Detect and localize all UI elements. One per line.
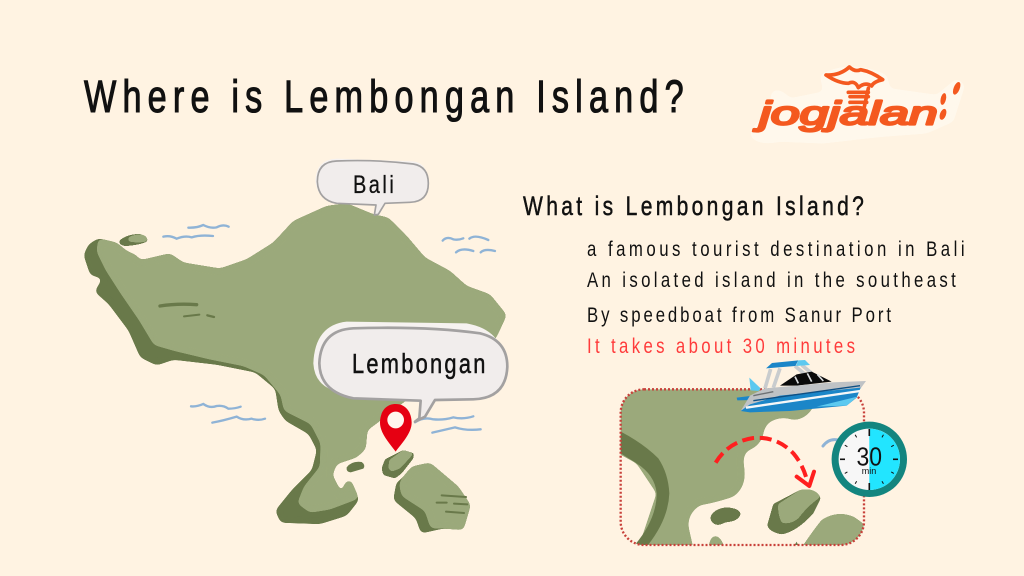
inset land and islands [620, 389, 864, 545]
logo halo [750, 67, 965, 143]
logo wordmark: jogjalan [753, 95, 938, 132]
logo: jogjalan [750, 67, 965, 143]
small island northwest [119, 234, 148, 246]
Bali speech bubble [315, 159, 428, 215]
text block: facts: By speedboat from Sanur Port [587, 304, 892, 328]
Bali island shadow [84, 203, 507, 524]
icon: red location pin [380, 404, 412, 452]
stopwatch number: 30 [856, 442, 882, 472]
Nusa Penida island [393, 463, 471, 533]
map: Bali and Lembongan [84, 159, 507, 533]
terrain marks [160, 304, 214, 317]
inset dotted frame [621, 389, 864, 545]
Bali island land [97, 203, 507, 513]
logo umbrella [826, 67, 883, 108]
Lembongan island [382, 450, 414, 478]
water waves [163, 225, 495, 433]
dashed red route arrow [716, 438, 814, 486]
Lembongan speech bubble [313, 322, 507, 422]
Nusa Ceningan islet [347, 462, 364, 472]
bubble label: Bali: Bali [353, 171, 394, 199]
stopwatch face [839, 429, 900, 490]
Nusa Penida terrain marks [437, 495, 467, 513]
logo exclamation marks [938, 81, 962, 121]
stopwatch unit: min [862, 466, 876, 476]
stopwatch ring [832, 422, 907, 497]
icon: stopwatch 30 min [823, 422, 907, 497]
wave behind stopwatch [823, 440, 838, 446]
text block: facts: a famous tourist destination in Bali [587, 238, 965, 262]
title: Where is Lembongan Island? [84, 73, 684, 122]
text block: facts: It takes about 30 minutes [587, 335, 855, 359]
text block: facts: An isolated island in the southeast [587, 269, 956, 293]
heading: What is Lembongan Island?: What is Lembongan Island? [523, 192, 864, 222]
stopwatch ticks [840, 429, 898, 490]
inset map: route by speedboat [620, 388, 866, 546]
text block: facts [587, 238, 965, 359]
bubble label: Lembongan: Lembongan [352, 348, 485, 380]
icon: speedboat [737, 360, 866, 412]
